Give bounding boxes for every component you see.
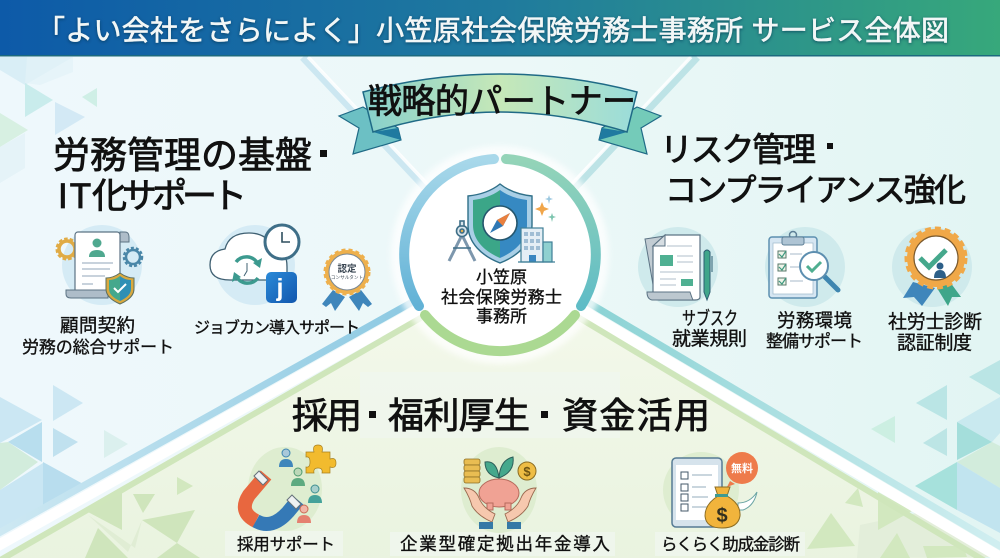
icon: advisory contract bbox=[57, 225, 142, 305]
title: 「よい会社をさらによく」小笠原社会保険労務士事務所 サービス全体図 bbox=[37, 15, 949, 46]
label: labor environment support: 労務環境 bbox=[777, 310, 852, 331]
icon: certified consultant badge: コンサルタント bbox=[331, 274, 363, 281]
label: recruiting support: 採用サポート bbox=[237, 535, 335, 554]
icon: subsidy check tablet: $ bbox=[716, 505, 728, 527]
heading: コンプライアンス強化 bbox=[665, 172, 966, 208]
icon: magnet recruiting bbox=[245, 445, 336, 531]
icon: certified consultant badge: 認定 bbox=[337, 263, 357, 275]
bottom-left triangles bbox=[0, 385, 200, 558]
icon: certified consultant badge bbox=[322, 250, 372, 311]
icon: piggy bank pension bbox=[461, 447, 537, 533]
line: lower left bbox=[0, 300, 424, 558]
panel: risk management and compliance bbox=[638, 131, 982, 354]
label: labor environment support bbox=[766, 310, 863, 351]
label: advisory contract bbox=[22, 315, 174, 357]
ribbon tail right bbox=[599, 107, 661, 154]
icon: subsidy check tablet bbox=[663, 452, 758, 528]
line: upper left bbox=[303, 57, 430, 187]
arc: bottom green bbox=[425, 315, 575, 351]
heading: 資金活用 bbox=[562, 395, 710, 436]
label: corporate defined contribution pension: 企業型確定拠出年金導入 bbox=[400, 534, 610, 554]
heading bbox=[660, 131, 966, 208]
line: upper right bbox=[570, 57, 697, 187]
office name bbox=[441, 268, 562, 326]
heading bbox=[292, 395, 710, 436]
label: certification system bbox=[888, 311, 982, 354]
label: labor environment support: 整備サポート bbox=[766, 332, 863, 351]
ribbon tail left bbox=[339, 107, 401, 154]
ribbon text: 戦略的パートナー bbox=[368, 83, 636, 121]
label: advisory contract: 顧問契約 bbox=[60, 315, 135, 336]
label: advisory contract: 労務の総合サポート bbox=[22, 338, 174, 357]
arc: left blue bbox=[404, 159, 494, 306]
arc: right teal bbox=[506, 159, 596, 306]
label: work rules: 就業規則 bbox=[672, 328, 747, 350]
heading: 福利厚生 bbox=[388, 395, 530, 436]
ribbon: strategic partner bbox=[339, 74, 661, 154]
heading bbox=[53, 135, 327, 216]
top-left triangles bbox=[0, 57, 97, 183]
icon: subscription work rules bbox=[638, 227, 718, 307]
heading: リスク管理 bbox=[660, 131, 816, 168]
icon: Jobcan cloud: j bbox=[276, 274, 283, 302]
office name: 事務所 bbox=[476, 307, 527, 326]
icon: Jobcan cloud bbox=[210, 225, 299, 305]
heading: 採用 bbox=[292, 395, 362, 436]
office name: 社会保険労務士 bbox=[441, 288, 562, 307]
label: certification system: 認証制度 bbox=[897, 332, 972, 354]
heading: IT bbox=[58, 177, 93, 216]
office name: 小笠原 bbox=[476, 268, 527, 287]
icon: sparkles bbox=[535, 195, 556, 222]
center hub bbox=[391, 146, 609, 364]
icon: piggy bank pension: $ bbox=[523, 464, 531, 479]
label: work rules: サブスク bbox=[682, 308, 738, 329]
icon: shield with compass bbox=[468, 184, 532, 263]
label: work rules bbox=[672, 308, 747, 350]
bottom-right triangles bbox=[807, 360, 1000, 558]
panel: labor management and IT bbox=[22, 135, 372, 357]
label: Jobcan support: ジョブカン導入サポート bbox=[194, 318, 360, 337]
icon: sharoushi certification badge bbox=[892, 227, 972, 307]
panel: recruiting, benefits and funding bbox=[237, 395, 800, 554]
title bar bbox=[0, 0, 1000, 56]
icon: subsidy check tablet: 無料 bbox=[731, 461, 753, 475]
heading: 労務管理の基盤 bbox=[53, 135, 312, 176]
icon: buildings bbox=[518, 228, 555, 262]
icon: labor environment checklist bbox=[765, 227, 845, 307]
label: easy subsidy diagnosis: らくらく助成金診断 bbox=[661, 535, 800, 554]
icon: compass tool bbox=[449, 221, 475, 261]
line: lower right bbox=[576, 300, 1000, 558]
heading: 化サポート bbox=[92, 177, 249, 216]
label: certification system: 社労士診断 bbox=[888, 311, 982, 333]
